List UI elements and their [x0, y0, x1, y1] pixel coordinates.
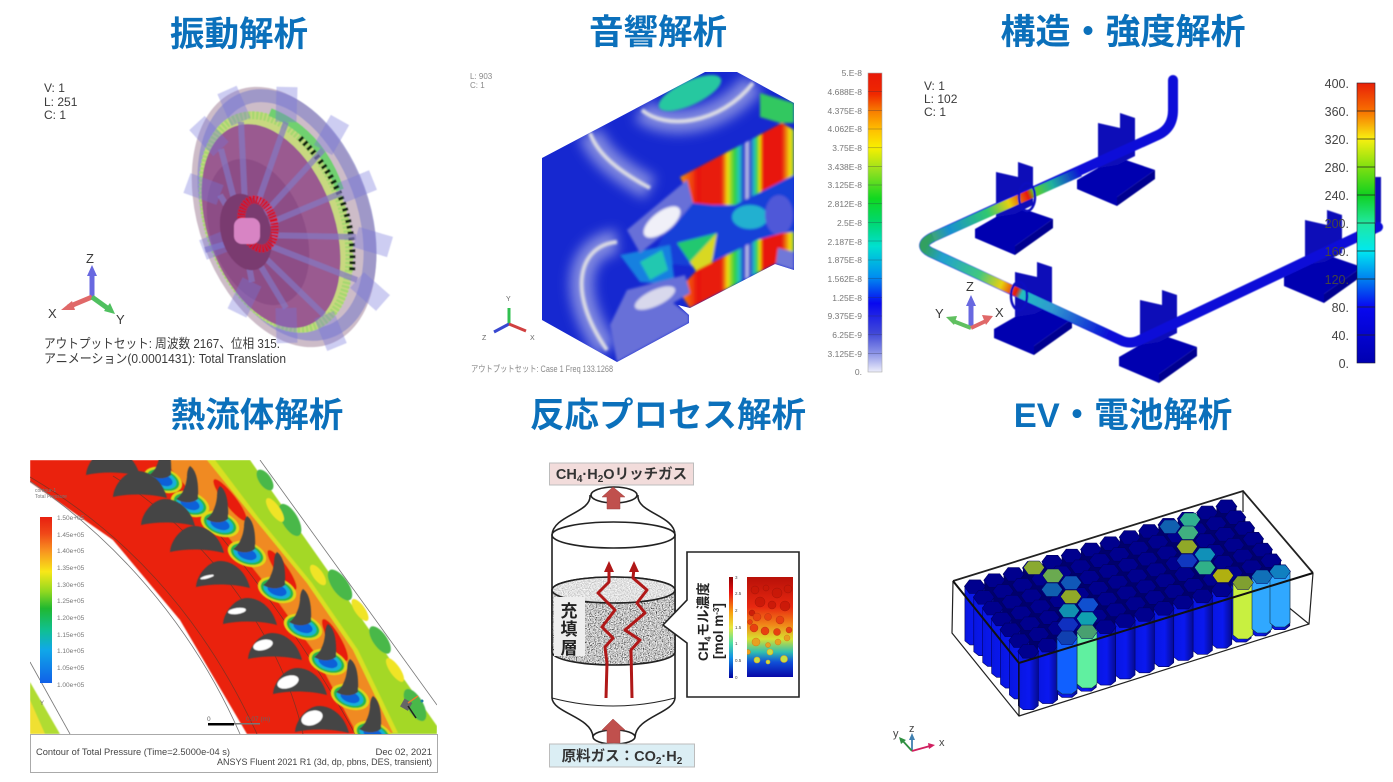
- concentration callout: モル濃度: [696, 582, 711, 636]
- colour legend: 2.5E-8: [837, 218, 862, 228]
- model labels: C: 1: [470, 81, 485, 90]
- colour legend: 3.125E-8: [828, 180, 862, 190]
- scale bar: [207, 716, 270, 726]
- outlet gas label: 2: [598, 474, 604, 485]
- colour legend: 4.688E-8: [828, 87, 862, 97]
- stat readout: C: 1: [924, 105, 946, 119]
- legend scale values: 120.: [1325, 273, 1349, 287]
- legend: 1.20e+05: [57, 615, 85, 622]
- legend: contour-1: [35, 488, 56, 494]
- colour legend: 3.125E-9: [828, 349, 862, 359]
- stat readout: [924, 79, 958, 119]
- blade row one: [86, 449, 349, 733]
- outlet gas label: CH: [556, 467, 577, 483]
- blade row two: [144, 460, 392, 734]
- legend: 1.40e+05: [57, 548, 85, 555]
- colour legend: 2.812E-8: [828, 199, 862, 209]
- axis triad: [48, 251, 125, 327]
- pipe assembly: [924, 80, 1381, 383]
- axis triad: z: [909, 723, 914, 735]
- outlet gas label: 4: [577, 474, 583, 485]
- inlet gas label: 2: [677, 756, 683, 767]
- footer caption box: Dec 02, 2021: [375, 747, 432, 758]
- legend: Total Pressure: [35, 494, 67, 500]
- output set caption: アニメーション(0.0001431): Total Translation: [44, 351, 286, 366]
- title: EV and battery analysis: EV・電池解析: [1014, 397, 1232, 435]
- colour legend: 1.875E-8: [828, 255, 862, 265]
- legend scale values: 400.: [1325, 77, 1349, 91]
- output set caption: [44, 336, 286, 366]
- reactor vessel: [552, 487, 675, 744]
- axis triad: [482, 296, 535, 342]
- model labels: L: 903: [470, 72, 493, 81]
- axis triad: Y: [116, 312, 125, 327]
- legend scale values: 40.: [1332, 329, 1349, 343]
- acoustic contour model: [540, 68, 796, 364]
- packed bed: 充: [560, 602, 578, 621]
- concentration callout: 2.5: [735, 591, 742, 596]
- colour legend: 0.: [855, 367, 862, 377]
- title: reaction process analysis: 反応プロセス解析: [530, 397, 806, 435]
- panel: vibration analysis: [44, 61, 410, 373]
- concentration callout: 0: [735, 675, 738, 680]
- inlet gas label: [550, 744, 694, 767]
- stat readout: L: 251: [44, 95, 78, 109]
- axis triad: y: [893, 728, 899, 740]
- panel: acoustic analysis: [470, 68, 882, 377]
- stat readout: V: 1: [924, 79, 945, 93]
- colour legend: 4.375E-8: [828, 106, 862, 116]
- stat readout: C: 1: [44, 108, 66, 122]
- output set caption: アウトプットセット: 周波数 2167、位相 315.: [44, 336, 280, 351]
- axis triad: Z: [86, 251, 94, 266]
- motor disk model: [158, 61, 410, 373]
- model labels: アウトプットセット: Case 1 Freq 133.1268: [471, 364, 613, 374]
- legend: 1.05e+05: [57, 665, 85, 672]
- legend scale values: 160.: [1325, 245, 1349, 259]
- colour legend: 2.187E-8: [828, 237, 862, 247]
- model labels: [470, 72, 613, 374]
- title: thermal fluid analysis: 熱流体解析: [171, 397, 343, 435]
- panel: structural and strength analysis: [924, 77, 1381, 383]
- legend scale values: 360.: [1325, 105, 1349, 119]
- inlet gas label: ·H: [661, 749, 677, 765]
- footer caption box: ANSYS Fluent 2021 R1 (3d, dp, pbns, DES, transient): [217, 757, 432, 768]
- concentration callout: [mol m: [711, 615, 726, 659]
- legend: 1.00e+05: [57, 682, 85, 689]
- colour legend: 9.375E-9: [828, 311, 862, 321]
- axis triad: [935, 279, 1004, 328]
- footer caption box: [30, 734, 438, 772]
- title: structural and strength analysis: 構造・強度解析: [1000, 13, 1246, 52]
- scale bar: 0.07 (m): [246, 716, 270, 723]
- front edge of bounding box: [953, 573, 1313, 716]
- stat readout: V: 1: [44, 81, 65, 95]
- battery cell array: [964, 500, 1290, 710]
- concentration callout: 3: [735, 575, 738, 580]
- footer caption box: Contour of Total Pressure (Time=2.5000e-04 s): [36, 747, 230, 758]
- axis triad: [893, 723, 945, 751]
- legend scale values: 280.: [1325, 161, 1349, 175]
- colour legend: 6.25E-9: [832, 330, 862, 340]
- axis triad: Z: [482, 335, 487, 342]
- axis triad: Y: [506, 296, 511, 303]
- title: vibration analysis: 振動解析: [170, 16, 308, 54]
- colour legend: 1.562E-8: [828, 274, 862, 284]
- legend scale values: 240.: [1325, 189, 1349, 203]
- packed bed: 填: [560, 620, 578, 639]
- axis triad: X: [48, 306, 57, 321]
- back edges of bounding box: [952, 491, 1313, 716]
- colour legend: 5.E-8: [842, 68, 862, 78]
- title: acoustic analysis: 音響解析: [589, 14, 727, 52]
- legend: 1.10e+05: [57, 648, 85, 655]
- legend: 1.15e+05: [57, 632, 85, 639]
- concentration callout: CH: [696, 642, 711, 661]
- packed bed: 層: [560, 639, 578, 658]
- concentration callout: 4: [703, 636, 713, 642]
- legend: [35, 488, 85, 707]
- outlet arrow: [602, 487, 625, 509]
- concentration callout: 2: [735, 608, 738, 613]
- colour legend: [1357, 83, 1375, 363]
- concentration callout: 0.5: [735, 658, 742, 663]
- concentration callout: 1.5: [735, 625, 742, 630]
- legend: 1.45e+05: [57, 532, 85, 539]
- stat readout: L: 102: [924, 92, 958, 106]
- concentration callout: [663, 552, 799, 697]
- legend: Y: [40, 701, 44, 707]
- packed bed: [552, 577, 675, 665]
- panel: reaction process analysis: [550, 463, 799, 767]
- stat readout: [44, 81, 78, 122]
- legend scale values: 200.: [1325, 217, 1349, 231]
- legend: 1.50e+05: [57, 515, 85, 522]
- inlet arrow: [602, 719, 625, 743]
- concentration callout: -3: [712, 607, 721, 615]
- axis triad: x: [939, 737, 945, 749]
- colour legend: 4.062E-8: [828, 124, 862, 134]
- colour legend: 3.438E-8: [828, 162, 862, 172]
- axis triad: X: [530, 335, 535, 342]
- axis triad: Y: [935, 306, 944, 321]
- legend scale values: [1325, 77, 1349, 371]
- legend scale values: 320.: [1325, 133, 1349, 147]
- outlet gas label: Oリッチガス: [603, 466, 687, 483]
- outlet gas label: ·H: [582, 467, 598, 483]
- axis triad: X: [995, 305, 1004, 320]
- pressure contour field: [30, 460, 437, 734]
- gas flow arrows: [598, 561, 647, 698]
- colour legend: [828, 68, 882, 377]
- inlet gas label: 原料ガス：CO: [562, 749, 656, 765]
- legend scale values: 80.: [1332, 301, 1349, 315]
- concentration callout: 1: [735, 641, 738, 646]
- legend: 1.35e+05: [57, 565, 85, 572]
- legend: 1.30e+05: [57, 582, 85, 589]
- outlet gas label: [550, 463, 694, 485]
- colour legend: 3.75E-8: [832, 143, 862, 153]
- panel: EV battery analysis: [893, 491, 1313, 751]
- panel: thermal fluid analysis: [28, 442, 438, 772]
- orientation marker: [400, 696, 424, 718]
- axis triad: Z: [966, 279, 974, 294]
- legend: 1.25e+05: [57, 598, 85, 605]
- colour legend: 1.25E-8: [832, 293, 862, 303]
- concentration callout: ]: [711, 603, 726, 608]
- inlet gas label: 2: [656, 756, 662, 767]
- scale bar: 0: [207, 716, 211, 723]
- legend scale values: 0.: [1339, 357, 1349, 371]
